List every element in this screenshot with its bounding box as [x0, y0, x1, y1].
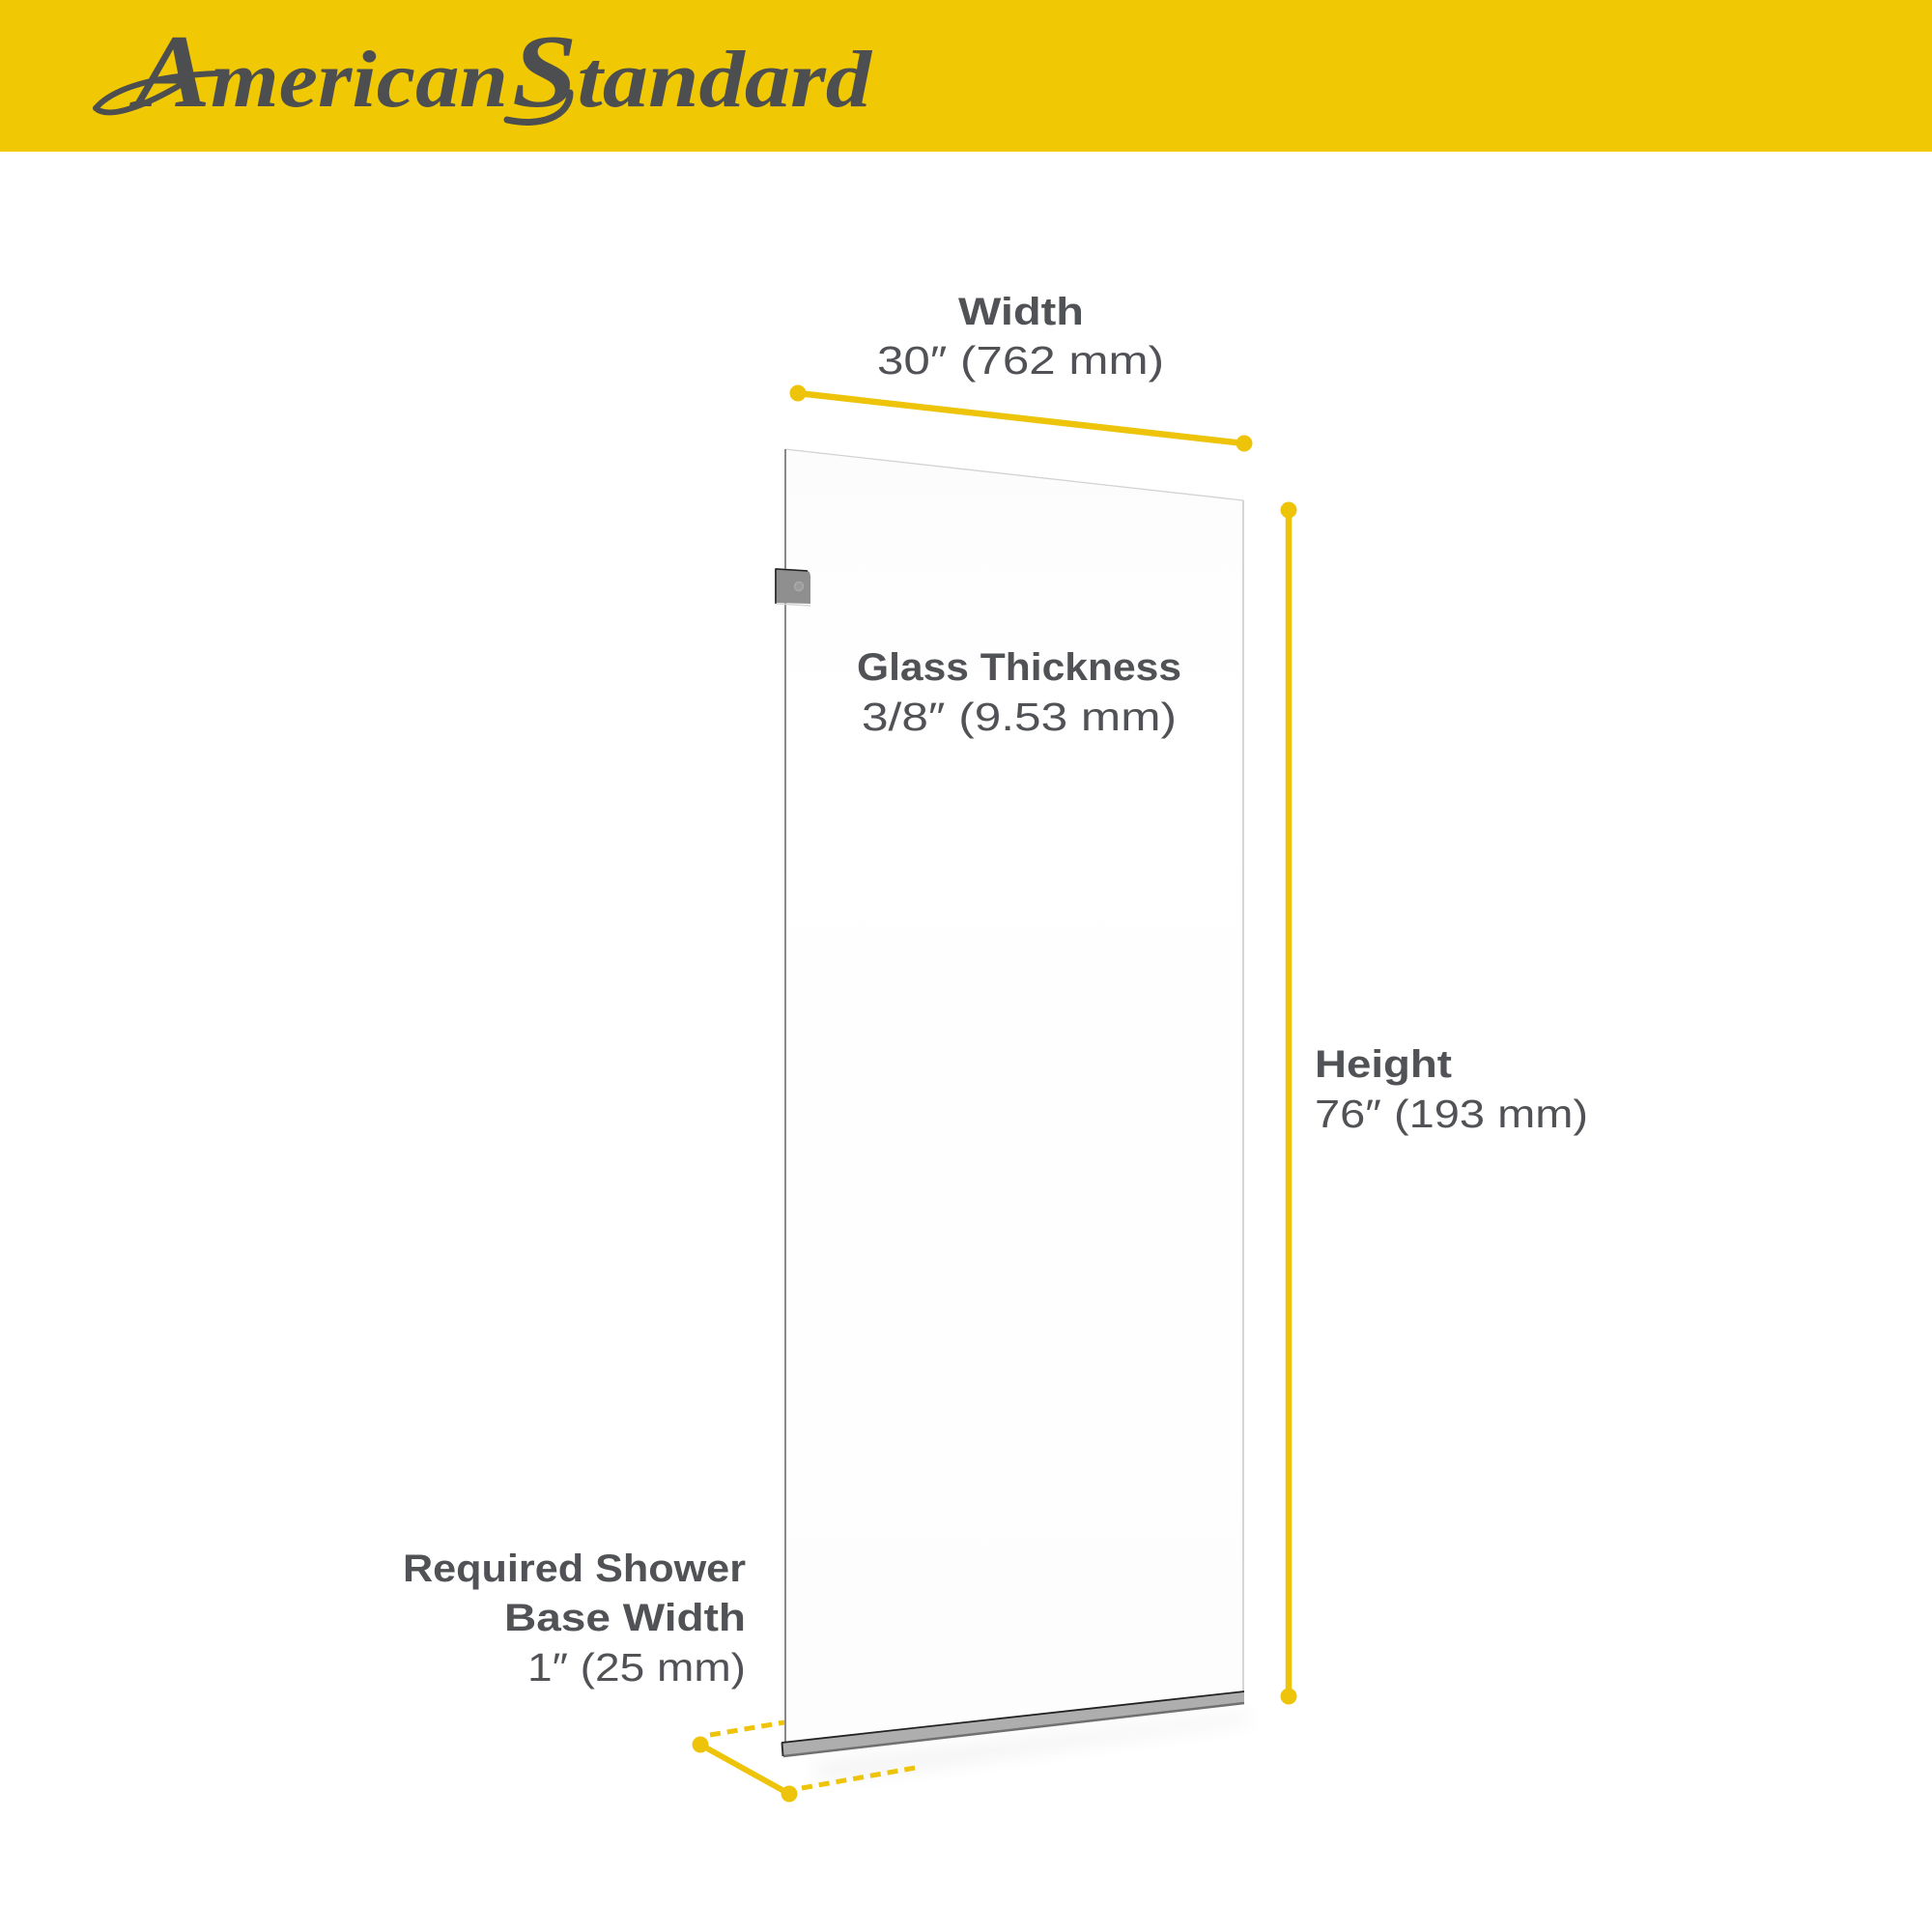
- glass panel: [785, 449, 1243, 1742]
- clip light edge: [777, 604, 810, 606]
- bottom rail: [781, 1691, 1244, 1757]
- base left dot: [692, 1737, 709, 1752]
- glass right edge: [1242, 500, 1244, 1691]
- logo word: Standard: Standard: [512, 14, 873, 129]
- base value: 1″ (25 mm): [527, 1645, 746, 1690]
- width start dot: [790, 384, 806, 402]
- front dashed guide: [802, 1767, 921, 1788]
- rail body: [781, 1691, 1244, 1757]
- glass left edge: [784, 449, 786, 1742]
- base label line two: Base Width: [504, 1597, 746, 1639]
- width line: [798, 393, 1244, 443]
- height label: [1315, 1043, 1588, 1136]
- rail end cap: [782, 1743, 783, 1756]
- clip dark edge: [776, 569, 808, 604]
- base width dimension: [692, 1722, 921, 1803]
- height value: 76″ (193 mm): [1315, 1092, 1588, 1136]
- glass clip hardware: [775, 568, 810, 606]
- clip screw: [794, 582, 804, 591]
- height dimension line: [1281, 502, 1296, 1704]
- width label: [877, 291, 1164, 383]
- panel shadow on floor: [811, 1712, 1252, 1779]
- height line: [1286, 510, 1292, 1696]
- glass top edge: [785, 449, 1243, 500]
- glass thickness label: [857, 646, 1181, 739]
- width heading: Width: [958, 291, 1084, 333]
- logo word: American: American: [129, 14, 508, 129]
- brand logo: [96, 14, 873, 129]
- rail top highlight line: [781, 1691, 1244, 1743]
- logo swash tail: [507, 93, 570, 122]
- height heading: Height: [1315, 1043, 1452, 1086]
- back dashed guide: [710, 1722, 784, 1735]
- logo swash: [96, 73, 217, 112]
- width value: 30″ (762 mm): [877, 338, 1164, 383]
- required shower base width label: [403, 1548, 746, 1690]
- clip body: [775, 568, 810, 604]
- height top dot: [1281, 502, 1296, 518]
- glass thickness heading: Glass Thickness: [857, 646, 1181, 689]
- base label line one: Required Shower: [403, 1548, 746, 1590]
- rail bottom line: [783, 1703, 1244, 1756]
- glass thickness value: 3/8″ (9.53 mm): [862, 695, 1177, 739]
- height bottom dot: [1281, 1689, 1296, 1704]
- width dimension line: [790, 384, 1252, 452]
- width end dot: [1236, 435, 1252, 452]
- header banner: [0, 0, 1932, 152]
- base right dot: [781, 1785, 798, 1803]
- base width line: [700, 1745, 789, 1794]
- glass pane: [785, 449, 1243, 1742]
